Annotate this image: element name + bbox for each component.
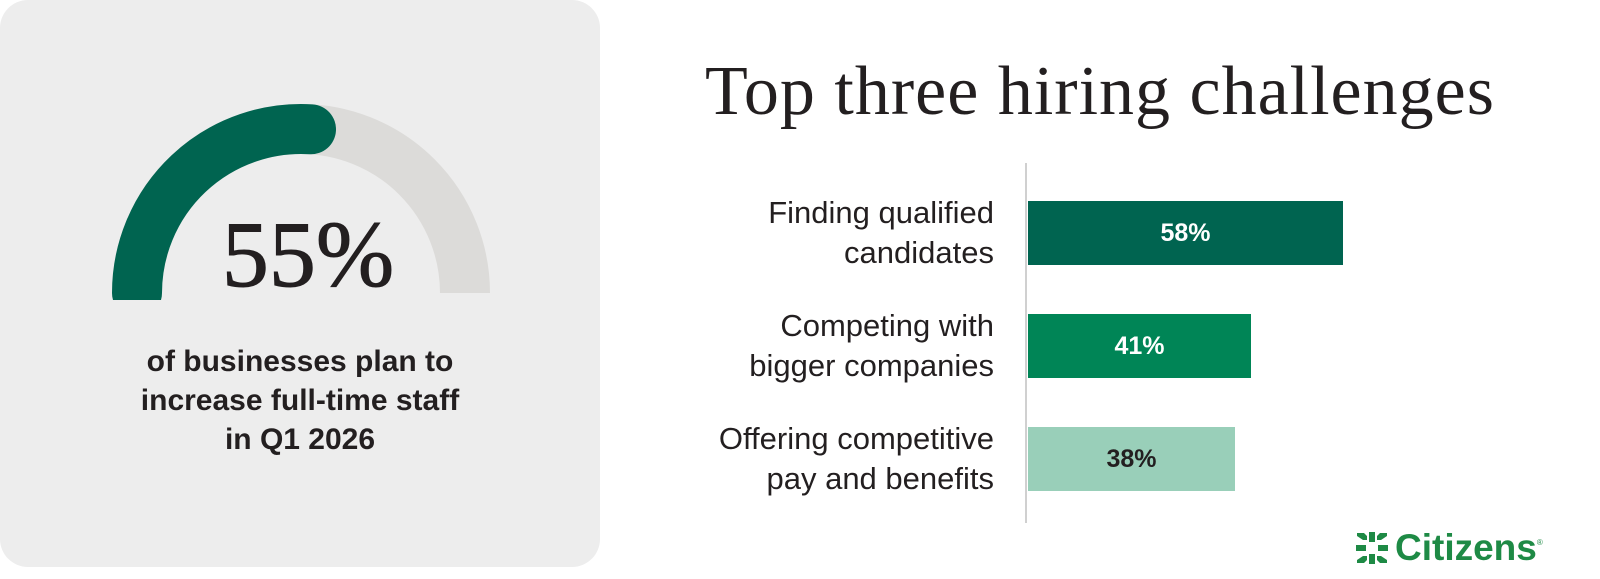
label 2: Competing with bbox=[780, 308, 994, 343]
bar 1 bbox=[1028, 201, 1343, 265]
gauge chart bbox=[112, 104, 490, 300]
bar 2: 41% bbox=[1114, 332, 1165, 360]
bar 1: 58% bbox=[1160, 218, 1211, 246]
label 1: Finding qualified bbox=[768, 195, 994, 230]
label 2 bbox=[749, 308, 994, 383]
label 1: candidates bbox=[844, 235, 994, 270]
bar 3 bbox=[1028, 427, 1235, 491]
title: Top three hiring challenges bbox=[705, 53, 1495, 130]
label 3 bbox=[719, 421, 994, 496]
label 2: bigger companies bbox=[749, 348, 994, 383]
description: in Q1 2026 bbox=[225, 423, 375, 456]
label 3: Offering competitive bbox=[719, 421, 994, 456]
logo: Citizens: Citizens bbox=[1395, 527, 1537, 568]
bar 3: 38% bbox=[1106, 444, 1157, 472]
bar 2 bbox=[1028, 314, 1251, 378]
panel: gauge bbox=[0, 0, 600, 567]
axis line bbox=[1025, 163, 1027, 523]
logo: Citizens: ® bbox=[1537, 538, 1543, 547]
big number: 55% bbox=[222, 203, 394, 307]
label 3: pay and benefits bbox=[766, 461, 994, 496]
description bbox=[141, 345, 460, 456]
description: of businesses plan to bbox=[147, 345, 453, 378]
label 1 bbox=[768, 195, 994, 270]
description: increase full-time staff bbox=[141, 384, 459, 417]
